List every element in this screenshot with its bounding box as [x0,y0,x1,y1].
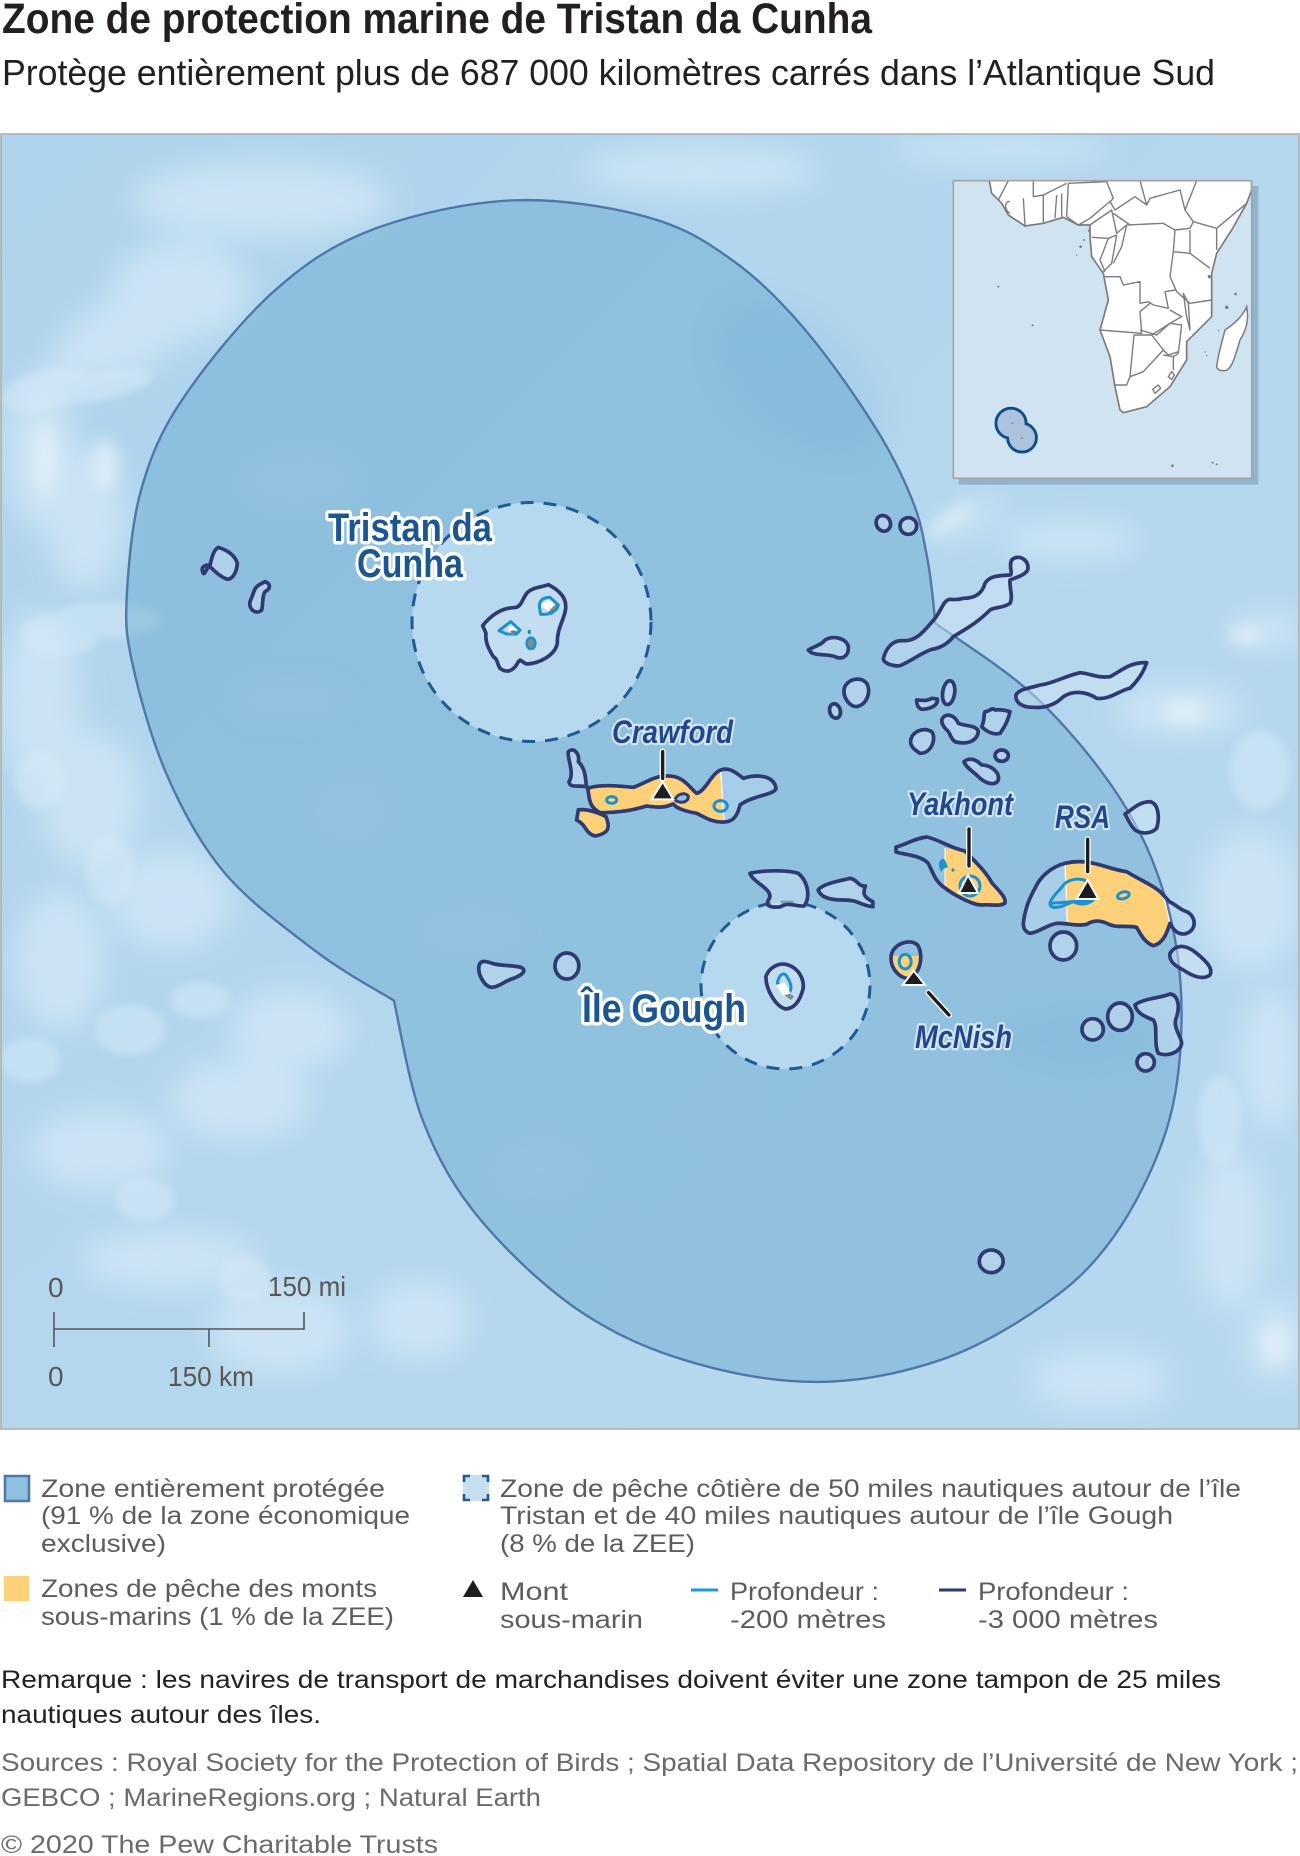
map panel [0,134,1300,1429]
seamounts west [202,547,269,612]
label: Île Gough: Île Gough [580,985,746,1031]
legend: seamount symbol: sous-marin [500,1606,643,1634]
legend: fully protected zone: Zone entièrement protégée [41,1475,385,1503]
fully protected zone: EEZ outline [126,200,1182,1382]
note: Remarque : les navires de transport de marchandises doivent éviter une zone tampon de 25 miles [1,1666,1221,1694]
scale bar: 150 mi [268,1271,346,1302]
legend: coastal fishing zone: Tristan et de 40 miles nautiques autour de l’île Gough [500,1502,1173,1530]
note: nautiques autour des îles. [1,1701,321,1729]
Yakhont seamount [896,829,1005,905]
label: McNish: McNish [915,1019,1012,1055]
legend: coastal fishing zone: (8 % de la ZEE) [500,1530,695,1558]
central and eastern seamounts [808,513,1158,833]
scale bar: 0 [48,1272,64,1303]
label: Tristan da Cunha [328,506,493,586]
sources [1,1749,1298,1812]
legend: depth 3000 m [939,1578,1158,1634]
label: Tristan da Cunha: Tristan da [328,506,493,550]
Crawford seamount group [568,750,776,836]
label: Tristan da Cunha: Cunha [357,542,464,586]
sources: Sources : Royal Society for the Protection of Birds ; Spatial Data Repository de l’Université de New York ; [1,1749,1298,1777]
inset locator map of Africa [953,181,1258,485]
label: RSA: RSA [1055,799,1110,835]
RSA seamount [1023,839,1211,1071]
legend: fully protected zone: (91 % de la zone économique [41,1502,410,1530]
Gough island and southern seamounts [479,871,1003,1273]
legend: seamount fishing zones: Zones de pêche des monts [41,1575,377,1603]
legend: depth 200 m: Profondeur : [730,1578,879,1606]
scale bar [48,1271,346,1392]
sources: GEBCO ; MarineRegions.org ; Natural Earth [1,1784,541,1812]
note [1,1666,1221,1729]
label: Yakhont: Yakhont [907,786,1014,822]
legend: depth 200 m [691,1578,886,1634]
legend: depth 3000 m: Profondeur : [978,1578,1129,1606]
legend: seamount symbol: Mont [500,1578,568,1606]
subtitle: Protège entièrement plus de 687 000 kilomètres carrés dans l’Atlantique Sud [2,52,1215,93]
legend: depth 3000 m: -3 000 mètres [978,1606,1158,1634]
scale bar: 0 [48,1361,64,1392]
scale bar: 150 km [168,1361,254,1392]
label: Crawford: Crawford [612,714,734,750]
coastal fishing zone: Tristan [412,502,651,742]
coastal fishing zone: Gough [701,902,870,1069]
legend: seamount fishing zones [4,1575,394,1631]
legend: fully protected zone: exclusive) [41,1530,166,1558]
legend: coastal fishing zone: Zone de pêche côtière de 50 miles nautiques autour de l’île [500,1475,1241,1503]
map frame [1,134,1299,1429]
legend: coastal fishing zone [463,1475,1241,1558]
legend: depth 200 m: -200 mètres [730,1606,886,1634]
legend: fully protected zone [5,1475,410,1558]
Tristan da Cunha islands [483,585,566,671]
legend: seamount symbol [463,1578,643,1634]
legend: seamount fishing zones: sous-marins (1 % de la ZEE) [41,1603,394,1631]
